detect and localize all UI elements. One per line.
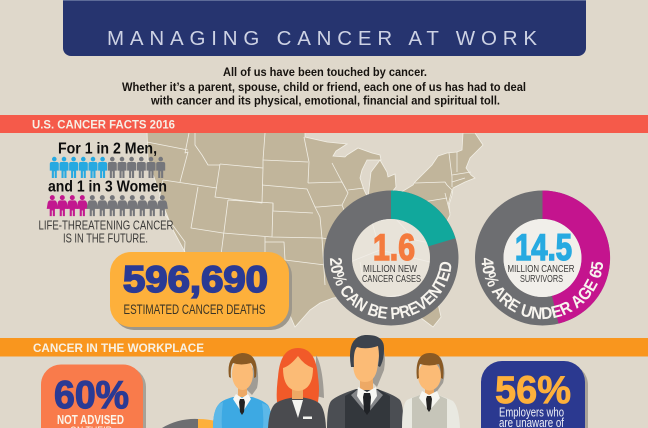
donut chart (cropped at bottom)	[162, 419, 232, 428]
label: SURVIVORS	[520, 273, 563, 285]
caption: LIFE-THREATENING CANCER	[38, 218, 174, 232]
pictogram: men	[50, 157, 165, 178]
label: NOT ADVISED	[57, 412, 124, 427]
heading: women: and 1 in 3 Women	[48, 178, 167, 196]
section bar: cancer in the workplace: CANCER IN THE WORKPLACE	[33, 341, 204, 355]
number: 596,690	[123, 259, 268, 300]
person: woman with red hair	[268, 348, 326, 428]
label	[362, 263, 421, 285]
section bar: cancer in the workplace	[0, 338, 648, 356]
caption	[38, 218, 174, 246]
intro text: with cancer and its physical, emotional, financial and spiritual toll.	[150, 94, 500, 108]
label: Employers who	[499, 406, 564, 420]
panel: 1 in 2 men, 1 in 3 women	[38, 140, 174, 246]
label: MILLION NEW	[363, 263, 417, 275]
illustration: four office workers	[213, 335, 460, 428]
ring text: 40% ARE UNDER AGE 65	[482, 258, 603, 320]
caption: IS IN THE FUTURE.	[63, 232, 148, 246]
label: ESTIMATED CANCER DEATHS	[124, 302, 266, 317]
label	[508, 263, 575, 285]
number: 1.6	[373, 227, 415, 268]
intro text: Whether it’s a parent, spouse, child or friend, each one of us has had to deal	[122, 80, 526, 94]
heading: men: For 1 in 2 Men,	[58, 140, 157, 158]
callout: 56% employers unaware	[481, 361, 588, 428]
label	[499, 406, 564, 428]
map of the United States	[147, 130, 483, 327]
pictogram: women	[47, 195, 168, 216]
number: 14.5	[515, 227, 572, 268]
donut: new cancer cases	[324, 190, 458, 326]
label: CANCER CASES	[362, 273, 421, 285]
person: man in dark suit	[327, 335, 403, 428]
person: man in grey vest	[402, 353, 460, 428]
donut: cancer survivors	[475, 190, 610, 326]
intro text: All of us have been touched by cancer.	[223, 65, 427, 79]
intro text	[122, 65, 526, 108]
callout: 60% not advised	[41, 364, 146, 428]
number: 60%	[54, 374, 129, 417]
ring text: 20% CAN BE PREVENTED	[330, 258, 452, 320]
header banner	[63, 0, 586, 56]
title: MANAGING CANCER AT WORK	[107, 27, 537, 50]
section bar: U.S. cancer facts	[0, 115, 648, 133]
person: man in blue	[213, 353, 272, 428]
callout: estimated cancer deaths	[110, 252, 292, 330]
label: MILLION CANCER	[508, 263, 575, 275]
section bar: U.S. cancer facts: U.S. CANCER FACTS 2016	[32, 118, 175, 132]
number: 56%	[495, 369, 571, 412]
